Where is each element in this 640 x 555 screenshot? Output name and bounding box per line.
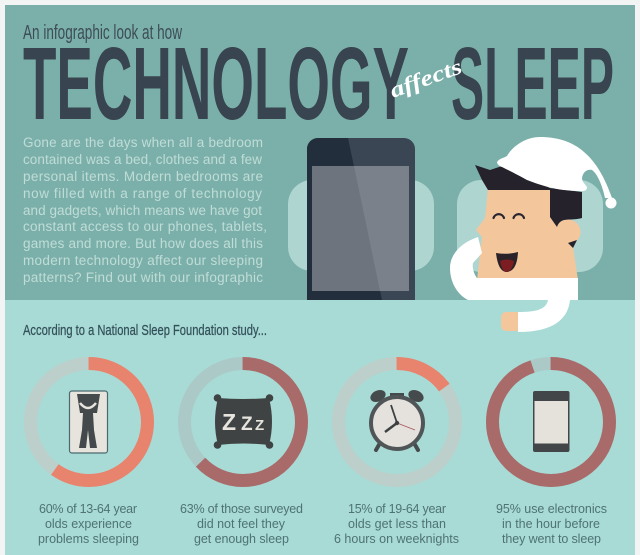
caption: 95% use electronics: [496, 502, 607, 516]
heading: intro line: An infographic look at how: [23, 22, 182, 44]
illustration: tablet: [307, 138, 415, 300]
icon: alarm clock: [368, 388, 426, 450]
caption: [38, 502, 139, 546]
caption: [334, 502, 459, 546]
caption: in the hour before: [502, 517, 600, 531]
icon: phone: [533, 391, 570, 452]
stat: 15 percent: [334, 364, 459, 546]
donut: 15 percent: [338, 364, 456, 480]
stat: 95 percent: [492, 364, 610, 546]
character: hair tip: [568, 240, 577, 248]
caption: 6 hours on weeknights: [334, 532, 459, 546]
icon: person in bed: [70, 391, 108, 453]
character: nightcap: [497, 137, 612, 198]
character: cap pompom: [606, 198, 616, 208]
text block: introduction: patterns? Find out with our infographic: [23, 270, 263, 285]
character: face: [476, 188, 578, 280]
text block: introduction: and gadgets, which means we have got: [23, 203, 262, 218]
text block: introduction: games and more. But how does all this: [23, 236, 263, 251]
icon: pillow: Z: [241, 414, 253, 435]
text block: introduction: [23, 135, 267, 285]
illustration: sleeping cap character: [450, 137, 616, 332]
title accent: affects: affects: [386, 54, 465, 103]
caption: [180, 502, 303, 546]
donut: 60 percent: [30, 364, 148, 480]
character: lower arm: [518, 300, 570, 332]
text block: introduction: modern technology affect our sleeping: [23, 253, 263, 268]
character: hand: [501, 312, 521, 331]
caption: olds experience: [45, 517, 132, 531]
text block: introduction: Gone are the days when all a bedroom: [23, 135, 263, 150]
text block: introduction: contained was a bed, clothes and a few: [23, 152, 262, 167]
heading: study intro: According to a National Sleep Foundation study...: [23, 322, 267, 339]
character: hair: [475, 165, 582, 227]
text block: introduction: personal items. Modern bedrooms are: [23, 169, 263, 184]
caption: they went to sleep: [502, 532, 601, 546]
caption: 15% of 19-64 year: [348, 502, 446, 516]
caption: 63% of those surveyed: [180, 502, 303, 516]
text block: introduction: now filled with a range of technology: [23, 186, 262, 201]
caption: problems sleeping: [38, 532, 139, 546]
character: smiling eyes: [494, 214, 524, 218]
panel: statistics background: [5, 300, 635, 555]
icon: pillow: Z: [222, 409, 236, 435]
panel: header background: [5, 5, 635, 300]
icon: pillow: Z: [255, 417, 264, 434]
icon: pillow: [214, 394, 273, 449]
caption: get enough sleep: [194, 532, 289, 546]
donut: 63 percent: [184, 364, 302, 480]
text block: introduction: constant access to our phones, tablets,: [23, 219, 267, 234]
character: raised arm and torso: [450, 237, 578, 300]
icon: rounded glow behind character: [457, 180, 603, 272]
caption: [496, 502, 607, 546]
character: mouth: [496, 252, 518, 272]
character: ear: [556, 220, 580, 244]
donut: 95 percent: [492, 364, 610, 480]
stat: 60 percent: [30, 364, 148, 546]
caption: olds get less than: [348, 517, 446, 531]
caption: did not feel they: [197, 517, 286, 531]
icon: rounded glow behind tablet: [288, 180, 434, 271]
stat: 63 percent: [180, 364, 303, 546]
caption: 60% of 13-64 year: [39, 502, 137, 516]
